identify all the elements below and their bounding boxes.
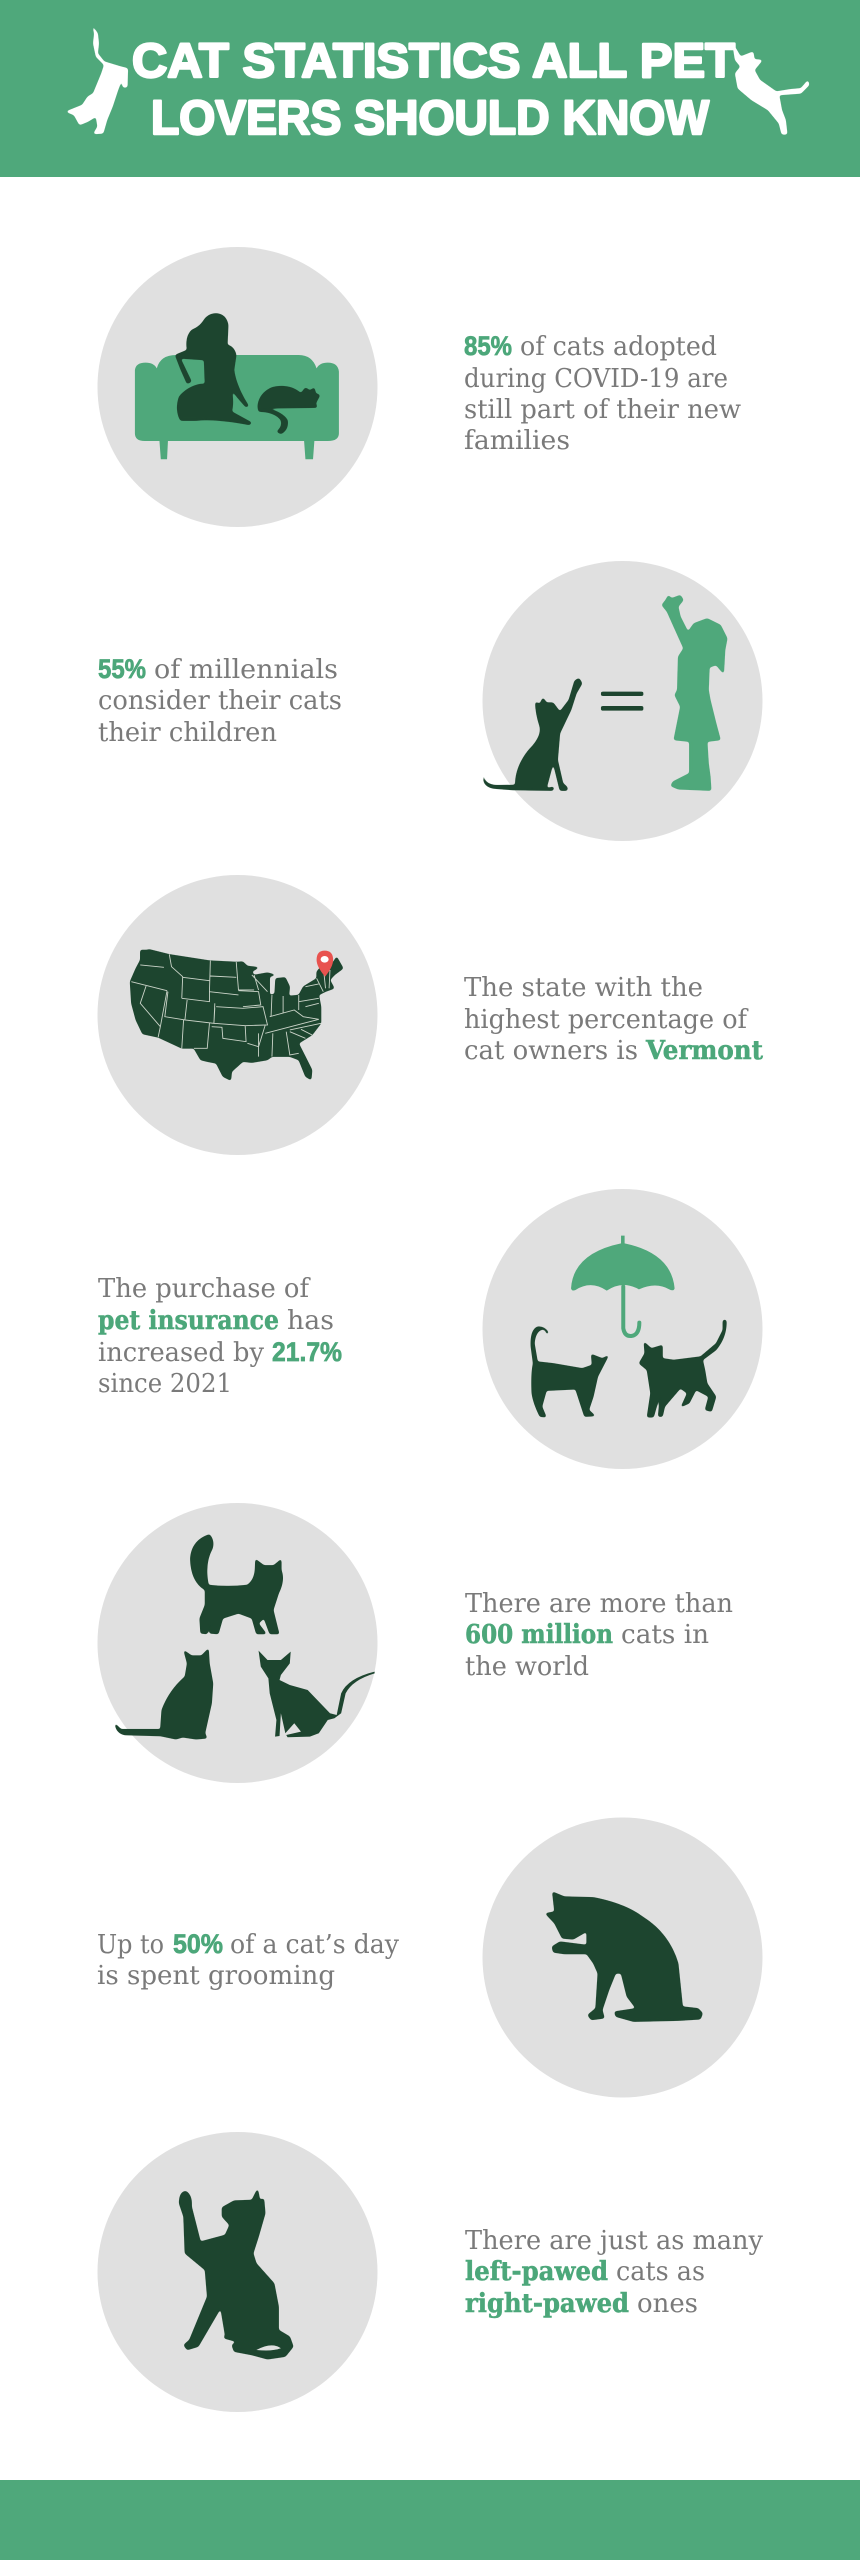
stat text: 600 million: the world [465,1652,589,1682]
panel: adopted cats [98,247,741,527]
panel: grooming [97,1818,762,2098]
stat text: 50%: 50% [173,1929,223,1959]
icon: woman and cat on sofa [135,313,339,459]
circle background [98,2132,378,2412]
stat text: pet insurance: has [287,1306,334,1336]
stat text: 600 million: cats in [621,1620,709,1650]
circle background [482,1189,762,1469]
title: CAT STATISTICS ALL PET [132,35,735,88]
panel: 600 million cats [98,1503,733,1783]
circle background [98,247,378,527]
stat text: left-pawed: left-pawed [465,2257,608,2287]
icon: white cat hanging right [732,43,809,134]
stat text: pet insurance: pet insurance [98,1306,279,1336]
stat text: 50%: of a cat’s day [230,1930,399,1960]
stat text: 85%: of cats adopted [520,332,717,362]
panel: pet insurance [98,1189,762,1469]
stat text: 600 million [465,1589,733,1682]
stat text: Vermont: cat owners is [464,1036,638,1066]
stat text: Vermont: Vermont [645,1036,763,1066]
icon: umbrella over two cats [531,1236,726,1417]
icon: three cats [115,1534,375,1739]
stat text: 85% [464,331,741,456]
stat text: 50%: Up to [97,1930,164,1960]
panel: left and right paws [98,2132,763,2412]
icon: map of the United States with pin [130,949,343,1081]
stat text: Vermont: highest percentage of [464,1005,749,1035]
stat text: left-pawed: There are just as many [465,2226,763,2256]
circle background [482,1818,762,2098]
footer band [0,2480,860,2560]
stat text: 55%: their children [98,718,277,748]
stat text: pet insurance: since 2021 [98,1369,232,1399]
icon: cat equals child [483,595,727,791]
stat text: left-pawed: right-pawed [465,2289,629,2319]
stat text: 85%: during COVID-19 are [464,364,728,394]
stat text: pet insurance: 21.7% [272,1337,342,1367]
circle background [98,875,378,1155]
circle background [98,1503,378,1783]
stat text: left-pawed [465,2226,763,2319]
stat text: 55%: 55% [98,654,146,684]
stat text: pet insurance: The purchase of [98,1274,311,1304]
icon: grooming cat [545,1892,703,2022]
title: LOVERS SHOULD KNOW [151,92,710,145]
circle background [482,561,762,841]
stat text: left-pawed: ones [637,2289,698,2319]
title [132,35,735,145]
stat text: 85%: still part of their new [464,395,741,425]
stat text: 50%: is spent grooming [97,1961,335,1991]
stat text: 600 million: 600 million [465,1620,613,1650]
stat text: 55%: consider their cats [98,686,342,716]
header band [0,0,860,177]
icon: cat raising paw [179,2188,293,2359]
icon: white cat hanging left [66,24,128,134]
stat text: 85%: families [464,426,570,456]
stat text: Vermont: The state with the [464,973,703,1003]
panel: Vermont [98,875,763,1155]
panel: millennials [98,561,762,841]
stat text: 55% [98,654,342,748]
stat text: pet insurance [98,1274,342,1399]
stat text: pet insurance: increased by [98,1338,264,1368]
stat text: Vermont [464,973,763,1066]
stat text: 85%: 85% [464,331,512,361]
stat text: 600 million: There are more than [465,1589,733,1619]
stat text: 50% [97,1929,399,1991]
stat text: 55%: of millennials [154,655,338,685]
stat text: left-pawed: cats as [616,2257,705,2287]
